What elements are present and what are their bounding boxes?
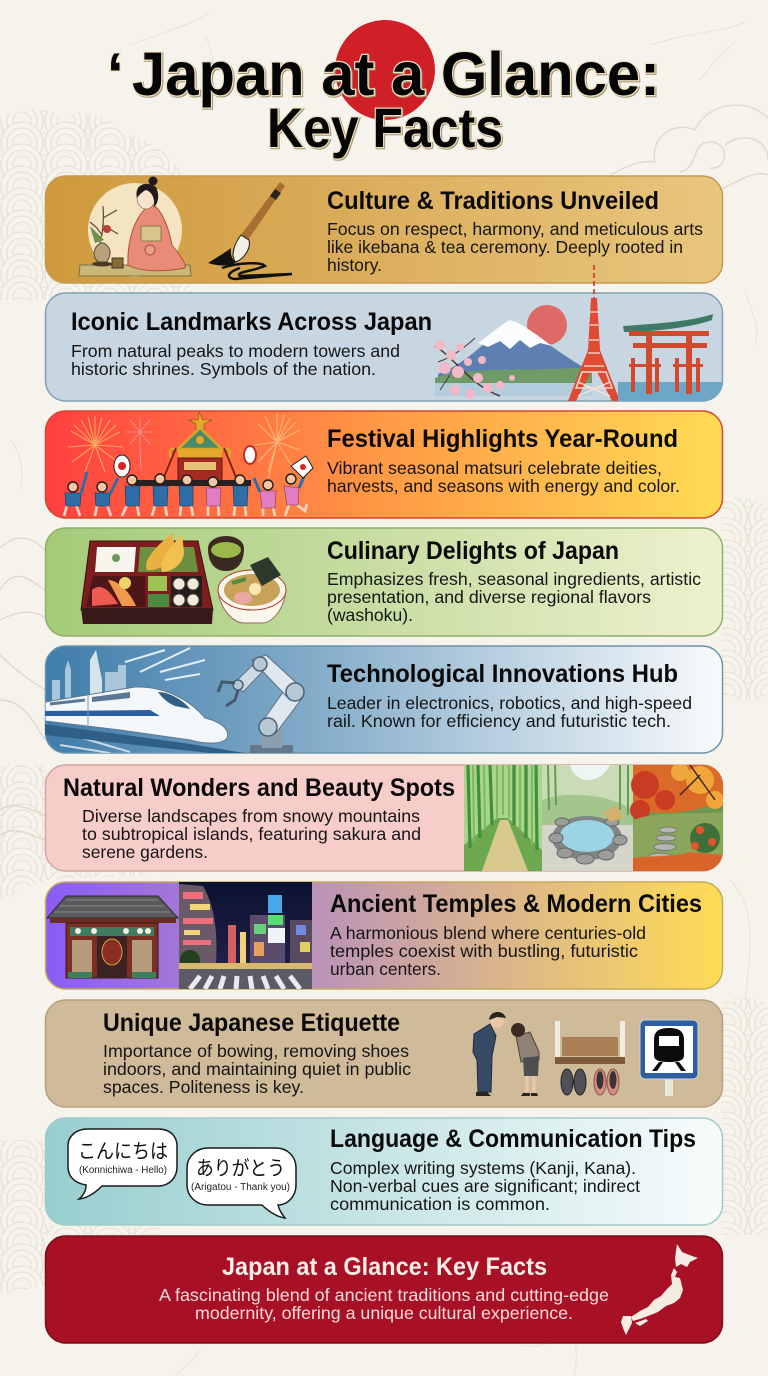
- body text: like ikebana & tea ceremony. Deeply rooted in: [327, 237, 683, 257]
- panel: temples and cities: [46, 882, 722, 989]
- icon: bowing people: [473, 1012, 539, 1096]
- title apostrophe: ‘: [107, 41, 124, 108]
- body text: presentation, and diverse regional flavors: [327, 587, 651, 607]
- icon: train station sign: [640, 1020, 698, 1096]
- card: [46, 293, 722, 401]
- body text: Diverse landscapes from snowy mountains: [82, 806, 420, 826]
- speech bubble: arigatou: (Arigatou - Thank you): [191, 1182, 290, 1193]
- heading: Japan at a Glance: Key Facts: [222, 1253, 547, 1281]
- body text: harvests, and seasons with energy and color.: [327, 476, 680, 496]
- body text: Vibrant seasonal matsuri celebrate deities,: [327, 458, 662, 478]
- icon: festival crowd: [64, 446, 313, 516]
- icon: ramen bowl: [218, 557, 286, 623]
- panel: natural wonders: [46, 763, 724, 871]
- body text: history.: [327, 255, 382, 275]
- body text: From natural peaks to modern towers and: [71, 341, 400, 361]
- body text: [159, 1285, 609, 1323]
- icon: map of Japan: [621, 1244, 698, 1335]
- body text: Complex writing systems (Kanji, Kana).: [330, 1158, 636, 1178]
- icon: genkan with shoes: [555, 1021, 625, 1095]
- heading: Natural Wonders and Beauty Spots: [63, 774, 455, 802]
- icon: temple gate: [47, 896, 178, 978]
- body text: [327, 219, 703, 275]
- icon: bento box: [81, 533, 213, 624]
- icon: matcha bowl: [208, 536, 244, 571]
- red sun circle: [335, 20, 435, 120]
- speech bubble: konnichiwa: [68, 1129, 177, 1199]
- panel: language tips: [46, 1118, 722, 1225]
- card: [46, 528, 722, 636]
- body text: to subtropical islands, featuring sakura and: [82, 824, 421, 844]
- body text: temples coexist with bustling, futuristic: [330, 941, 638, 961]
- card: [46, 411, 722, 518]
- illustration: Fuji, sakura, lake: [435, 305, 592, 399]
- illustration: bamboo forest: [464, 765, 542, 871]
- body text: A fascinating blend of ancient traditions and cutting-edge: [159, 1285, 609, 1305]
- card: [46, 1118, 722, 1225]
- heading: Festival Highlights Year-Round: [327, 425, 678, 453]
- panel: technological innovations: [45, 646, 722, 754]
- body text: [330, 923, 646, 979]
- speech bubble: konnichiwa: こんにちは: [78, 1141, 168, 1163]
- body text: Non-verbal cues are significant; indirect: [330, 1176, 640, 1196]
- icon: fireworks: [68, 414, 300, 480]
- heading: Iconic Landmarks Across Japan: [71, 308, 432, 336]
- icon: torii gate in water: [618, 314, 724, 402]
- body text: [327, 693, 692, 731]
- icon: calligraphy brush: [208, 182, 292, 279]
- speech bubble: arigatou: ありがとう: [196, 1157, 285, 1180]
- body text: A harmonious blend where centuries-old: [330, 923, 646, 943]
- body text: [103, 1041, 411, 1097]
- body text: Leader in electronics, robotics, and high-speed: [327, 693, 692, 713]
- body text: Emphasizes fresh, seasonal ingredients, artistic: [327, 569, 701, 589]
- card: [46, 646, 722, 753]
- body text: [327, 458, 680, 496]
- illustration: neon city at night: [179, 882, 312, 989]
- heading: Culture & Traditions Unveiled: [327, 187, 659, 215]
- body text: rail. Known for efficiency and futuristic tech.: [327, 711, 671, 731]
- body text: [82, 806, 421, 862]
- body text: urban centers.: [330, 959, 441, 979]
- body text: Focus on respect, harmony, and meticulous arts: [327, 219, 703, 239]
- icon: robot arm: [218, 655, 304, 754]
- body text: modernity, offering a unique cultural experience.: [195, 1303, 573, 1323]
- title line 2: Key Facts: [267, 96, 503, 159]
- card: [46, 176, 722, 283]
- body text: [327, 569, 701, 625]
- body text: Importance of bowing, removing shoes: [103, 1041, 409, 1061]
- icon: Tokyo Tower: [568, 265, 620, 401]
- body text: [71, 341, 400, 379]
- heading: Unique Japanese Etiquette: [103, 1009, 400, 1037]
- icon: city skyline and speed lines: [52, 648, 205, 705]
- panel: iconic landmarks: [46, 265, 724, 402]
- heading: Language & Communication Tips: [330, 1125, 696, 1153]
- card: [46, 765, 722, 871]
- panel: culinary delights: [46, 528, 722, 636]
- body text: [330, 1158, 640, 1214]
- title with red sun: [107, 20, 660, 159]
- speech bubble: arigatou: [187, 1148, 296, 1218]
- body text: spaces. Politeness is key.: [103, 1077, 304, 1097]
- card: [46, 1000, 722, 1107]
- panel: festival highlights: [46, 411, 722, 518]
- body text: indoors, and maintaining quiet in public: [103, 1059, 411, 1079]
- card: [46, 882, 722, 989]
- icon: kimono woman with ikebana: [79, 176, 191, 277]
- icon: shinkansen bullet train: [45, 687, 245, 753]
- body text: communication is common.: [330, 1194, 550, 1214]
- icon: mikoshi shrine: [135, 412, 251, 486]
- heading: Technological Innovations Hub: [327, 660, 678, 688]
- body text: serene gardens.: [82, 842, 208, 862]
- title line 1: Japan at a Glance:: [132, 40, 660, 108]
- panel: etiquette: [46, 1000, 722, 1107]
- heading: Ancient Temples & Modern Cities: [330, 890, 702, 918]
- card: [46, 1236, 722, 1343]
- illustration: onsen hot spring: [542, 765, 633, 871]
- illustration: autumn garden: [630, 763, 724, 871]
- body text: (washoku).: [327, 605, 413, 625]
- heading: Culinary Delights of Japan: [327, 537, 619, 565]
- panel: culture and traditions: [46, 176, 722, 283]
- panel: summary footer: [46, 1236, 722, 1343]
- body text: historic shrines. Symbols of the nation.: [71, 359, 376, 379]
- speech bubble: konnichiwa: (Konnichiwa - Hello): [79, 1165, 167, 1176]
